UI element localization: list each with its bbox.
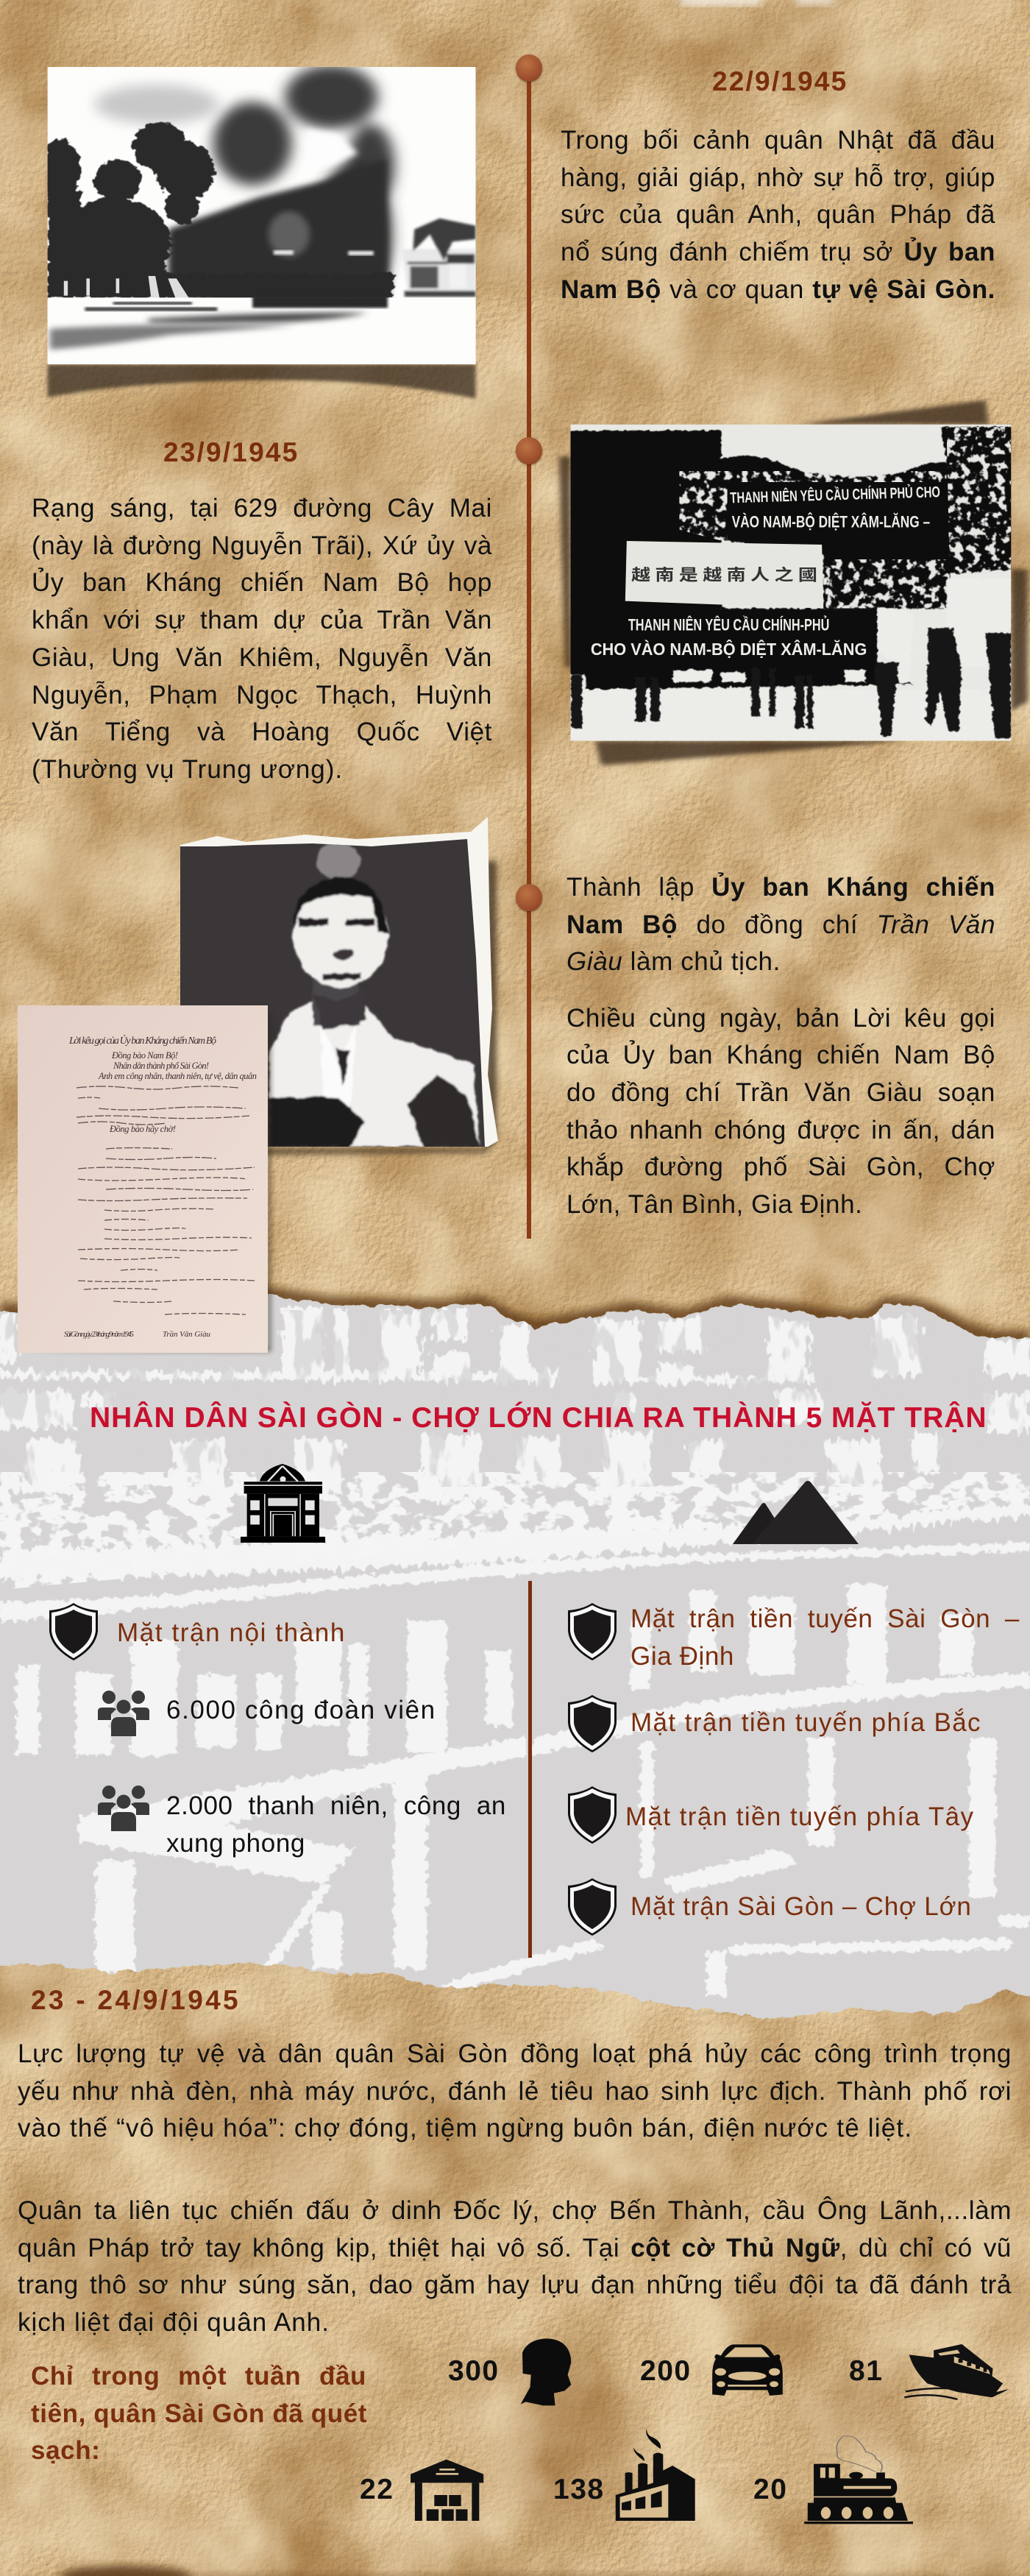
photo: handwritten appeal document: Trần Văn Giàu xyxy=(163,1330,210,1339)
text block 22/9/1945: Nam Bộ và cơ quan tự vệ Sài Gòn. xyxy=(561,275,995,304)
text block committee founding: do đồng chí Trần Văn Giàu soạn xyxy=(566,1078,995,1107)
icon: warehouse xyxy=(353,2326,1030,2539)
paragraph: continued fighting: quân Pháp trở tay không kịp, thiệt hại vô số. Tại cột cờ Thủ Ngữ, dù chỉ có vũ xyxy=(18,2234,1012,2262)
text block 22/9/1945 xyxy=(561,126,995,304)
text block committee founding: Nam Bộ do đồng chí Trần Văn xyxy=(566,910,995,939)
text block committee founding: khắp đường phố Sài Gòn, Chợ xyxy=(566,1153,995,1181)
banner lettering xyxy=(591,482,940,659)
date 23 - 24/9/1945: 23 - 24/9/1945 xyxy=(31,1985,241,2015)
text block 23/9/1945: Nguyễn, Phạm Ngọc Thạch, Huỳnh xyxy=(32,681,492,710)
label: western front: Mặt trận tiền tuyến phía Tây xyxy=(625,1802,974,1831)
text block 22/9/1945: nổ súng đánh chiếm trụ sở Ủy ban xyxy=(561,238,995,266)
paragraph: sabotage of the city xyxy=(18,2036,1012,2148)
photo: portrait of Trần Văn Giàu xyxy=(180,817,501,1159)
label: northern front: Mặt trận tiền tuyến phía Bắc xyxy=(631,1708,981,1737)
sign lettering: 越南是越南人之國 xyxy=(631,562,817,585)
heading: five fronts: NHÂN DÂN SÀI GÒN - CHỢ LỚN CHIA RA THÀNH 5 MẶT TRẬN xyxy=(90,1402,987,1434)
text block 23/9/1945: Rạng sáng, tại 629 đường Cây Mai xyxy=(32,494,492,523)
icon: factory xyxy=(353,2326,1030,2539)
text block 23/9/1945 xyxy=(32,494,492,784)
text block 22/9/1945: Trong bối cảnh quân Nhật đã đầu xyxy=(561,126,995,155)
icon: people 2000 xyxy=(98,1786,149,1832)
text: 2000 youth and police xyxy=(166,1787,506,1862)
text block 23/9/1945: (Thường vụ Trung ương). xyxy=(32,755,343,784)
stat: 138 factories: 138 xyxy=(553,2474,605,2505)
stat: 20 locomotives: 20 xyxy=(753,2474,787,2505)
text block 23/9/1945: Văn Tiểng và Hoàng Quốc Việt xyxy=(32,718,492,746)
shield: Saigon – Cho Lon front xyxy=(568,1878,617,1936)
stat: 200 vehicles: 200 xyxy=(640,2355,692,2387)
timeline line upper xyxy=(527,68,531,1239)
text block committee founding: Chiều cùng ngày, bản Lời kêu gọi xyxy=(566,1004,995,1033)
text block committee founding: thảo nhanh chóng được in ấn, dán xyxy=(566,1116,995,1144)
icon: people 6000 xyxy=(98,1691,149,1737)
shield: northern front xyxy=(568,1695,617,1752)
photo: handwritten appeal document xyxy=(18,1005,275,1356)
photo: handwritten appeal document: Đồng bào hãy chờ! xyxy=(109,1124,176,1134)
paragraph: continued fighting: trang thô sơ như súng săn, dao găm hay lựu đạn những tiểu đội ta đã đánh trả xyxy=(18,2271,1012,2299)
timeline dot 3 xyxy=(516,884,542,911)
paragraph: continued fighting: Quân ta liên tục chiến đấu ở dinh Đốc lý, chợ Bến Thành, cầu Ông Lãnh,...làm xyxy=(18,2196,1012,2225)
icon: mountains xyxy=(732,1479,860,1546)
text block 23/9/1945: Ủy ban Kháng chiến Nam Bộ họp xyxy=(32,568,492,597)
callout: first week results: sạch: xyxy=(31,2436,100,2465)
text block 22/9/1945: hàng, giải giáp, nhờ sự hỗ trợ, giúp xyxy=(561,163,995,192)
label: inner-city front: Mặt trận nội thành xyxy=(117,1618,346,1647)
icon: city building xyxy=(241,1464,325,1543)
text: 6000 union members: 6.000 công đoàn viên xyxy=(166,1696,436,1724)
text block 22/9/1945: sức của quân Anh, quân Pháp đã xyxy=(561,200,995,229)
shield: western front xyxy=(568,1786,617,1844)
text block committee founding: Lớn, Tân Bình, Gia Định. xyxy=(566,1190,862,1219)
top-edge paper tears xyxy=(681,0,833,4)
callout: first week results: Chỉ trong một tuần đầu xyxy=(31,2362,366,2391)
text block 23/9/1945: khẩn với sự tham dự của Trần Văn xyxy=(32,606,492,634)
label: Saigon – Gia Dinh front: Gia Định xyxy=(631,1642,734,1671)
stat: 300 soldiers: 300 xyxy=(448,2355,500,2387)
paragraph: sabotage of the city: Lực lượng tự vệ và dân quân Sài Gòn đồng loạt phá hủy các công trình trọng xyxy=(18,2039,1012,2068)
timeline dot 1 xyxy=(516,54,542,82)
stat: 22 warehouses: 22 xyxy=(360,2474,394,2505)
photo: handwritten appeal document: Sài Gòn ngày 23 tháng 9 năm 1945 xyxy=(64,1330,135,1339)
photo: handwritten appeal document: Nhân dân thành phố Sài Gòn! xyxy=(113,1061,209,1071)
paragraph: sabotage of the city: yếu như nhà đèn, nhà máy nước, đánh lẻ tiêu hao sinh lực địch. Thành phố rơi xyxy=(18,2077,1012,2106)
banner lettering: CHO VÀO NAM-BỘ DIỆT XÂM-LĂNG xyxy=(591,640,867,659)
photo: banners, youth demonstration xyxy=(555,397,1030,768)
date 22/9/1945: 22/9/1945 xyxy=(712,66,848,96)
grey band xyxy=(0,1281,1030,2024)
crowd speckle xyxy=(0,1472,1030,1590)
photo: burning building, 22/9/1945 xyxy=(44,67,479,400)
label: Saigon – Cho Lon front: Mặt trận Sài Gòn – Chợ Lớn xyxy=(631,1892,972,1921)
paper bottom sheet xyxy=(0,1943,1030,2576)
icon: car xyxy=(353,2326,1030,2539)
stat: 81 ships: 81 xyxy=(849,2355,883,2387)
paragraph: sabotage of the city: vào thế “vô hiệu hóa”: chợ đóng, tiệm ngừng buôn bán, điện nước tê liệt. xyxy=(18,2114,912,2142)
shield: inner-city front xyxy=(49,1603,98,1660)
icon: steam train xyxy=(353,2326,1030,2539)
photo: handwritten appeal document: Đồng bào Nam Bộ! xyxy=(111,1050,178,1061)
photo: handwritten appeal document: Anh em công nhân, thanh niên, tự vệ, dân quân xyxy=(98,1071,257,1081)
text block committee founding xyxy=(566,872,995,1219)
foliage speckle xyxy=(673,427,1012,609)
text block committee founding: Giàu làm chủ tịch. xyxy=(566,947,781,976)
text: 2000 youth and police: xung phong xyxy=(166,1829,305,1858)
paragraph: continued fighting: kịch liệt đại đội quân Anh. xyxy=(18,2308,330,2337)
text block committee founding: của Ủy ban Kháng chiến Nam Bộ xyxy=(566,1041,995,1069)
divider between fronts xyxy=(528,1581,532,1958)
small house xyxy=(402,219,476,297)
paper top sheet xyxy=(0,0,1030,1369)
shield: Saigon – Gia Dinh front xyxy=(568,1603,617,1660)
callout: first week results xyxy=(31,2358,366,2470)
date 23/9/1945: 23/9/1945 xyxy=(163,437,299,467)
paragraph: continued fighting xyxy=(18,2193,1012,2342)
label: Saigon – Gia Dinh front xyxy=(631,1601,1020,1675)
banner lettering: THANH NIÊN YÊU CẦU CHÍNH-PHỦ xyxy=(628,615,829,634)
text block 23/9/1945: (này là đường Nguyễn Trãi), Xứ ủy và xyxy=(32,531,492,560)
text: 2000 youth and police: 2.000 thanh niên, công an xyxy=(166,1791,506,1820)
text block committee founding: Thành lập Ủy ban Kháng chiến xyxy=(566,873,995,902)
icon: soldier head xyxy=(353,2326,1030,2539)
timeline dot 2 xyxy=(516,437,542,464)
label: Saigon – Gia Dinh front: Mặt trận tiền tuyến Sài Gòn – xyxy=(631,1604,1020,1633)
callout: first week results: tiên, quân Sài Gòn đã quét xyxy=(31,2399,367,2428)
text block 23/9/1945: Giàu, Ung Văn Khiêm, Nguyễn Văn xyxy=(32,643,492,672)
icon: ship xyxy=(353,2326,1030,2539)
photo: handwritten appeal document: Lời kêu gọi của Ủy ban Kháng chiến Nam Bộ xyxy=(68,1034,216,1047)
